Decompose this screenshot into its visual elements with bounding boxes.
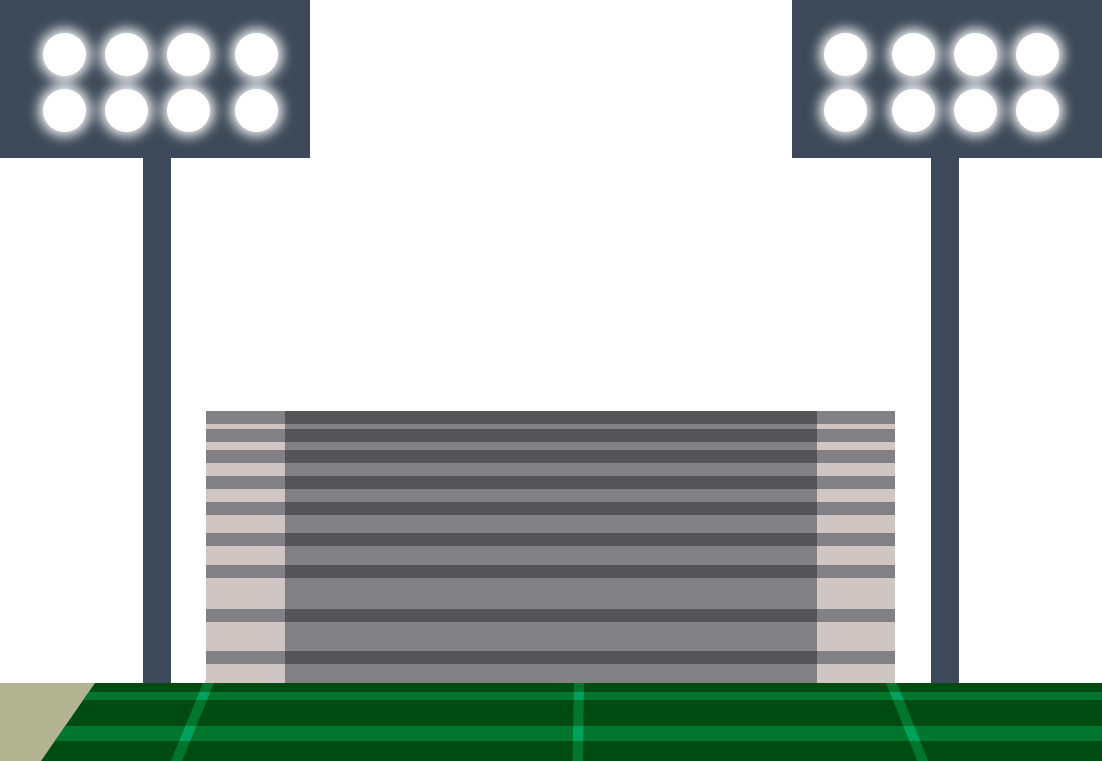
left floodlight tower xyxy=(0,0,310,683)
left lamp glows xyxy=(39,29,282,136)
pitch xyxy=(41,683,1102,761)
left lamps xyxy=(43,33,278,132)
left light panel xyxy=(0,0,310,158)
ground and field xyxy=(0,678,1102,761)
stand shaded centre xyxy=(285,411,817,683)
right floodlight tower xyxy=(792,0,1102,683)
track edge xyxy=(0,683,120,761)
centre row stripes xyxy=(285,411,817,664)
grandstand xyxy=(206,411,895,683)
stand base xyxy=(206,411,895,683)
right light panel xyxy=(792,0,1102,158)
right pole xyxy=(931,150,959,683)
pitch stripes xyxy=(55,692,1102,741)
side row stripes xyxy=(206,411,895,664)
left pole xyxy=(143,150,171,683)
pitch line crossings xyxy=(179,692,920,741)
line end sliver xyxy=(204,678,206,683)
right lamp glows xyxy=(820,29,1063,136)
pitch lines xyxy=(171,683,928,761)
right lamps xyxy=(824,33,1059,132)
